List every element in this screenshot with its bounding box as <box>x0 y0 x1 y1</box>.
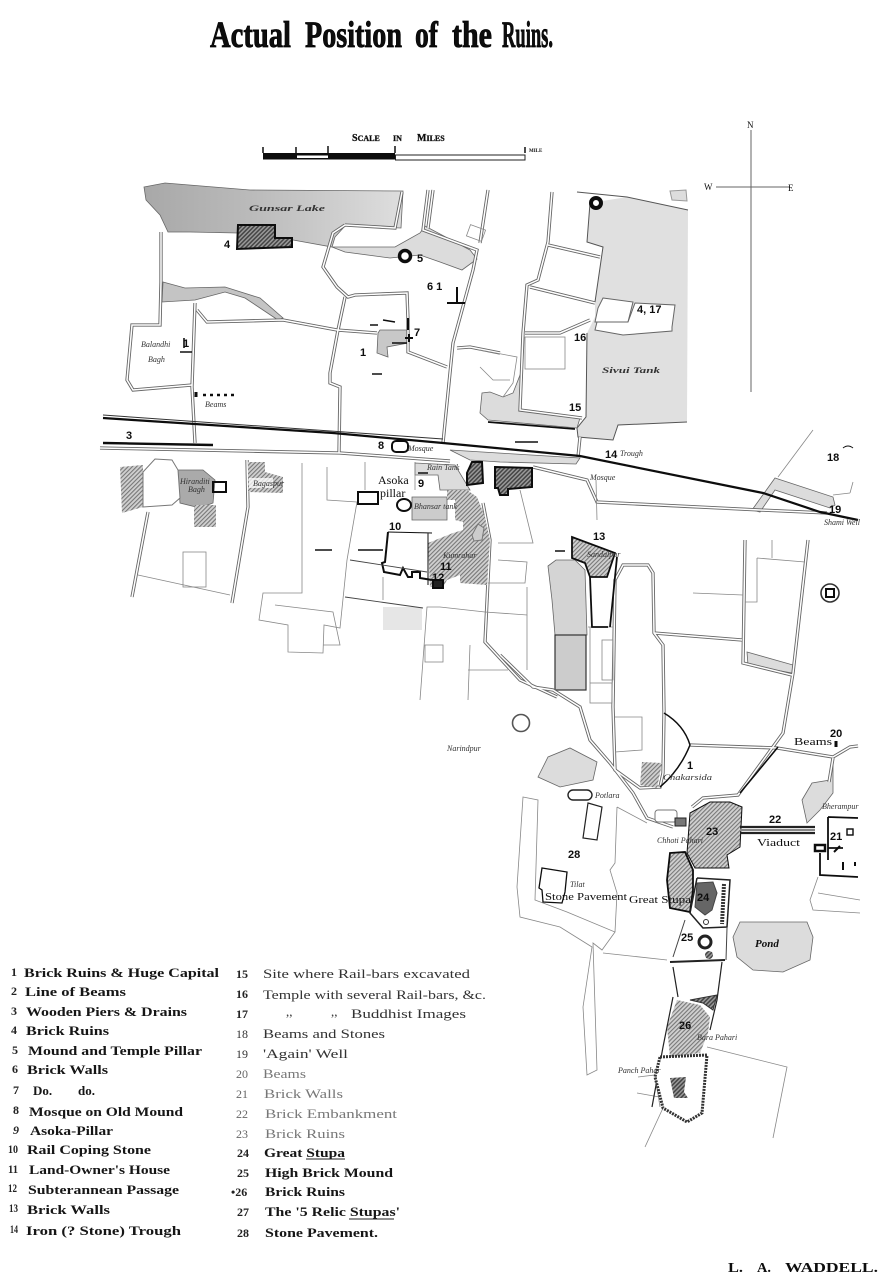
map numbers: 3 <box>126 430 132 442</box>
legend column: items 1 to 14: Brick Walls <box>27 1202 110 1217</box>
legend column: items 1 to 14: Mound and Temple Pillar <box>28 1043 202 1058</box>
scale label: CALE <box>358 134 380 143</box>
legend column: items 1 to 14: 3 <box>11 1004 17 1018</box>
legend column: items 1 to 14: Rail Coping Stone <box>27 1142 151 1157</box>
map numbers: 8 <box>378 440 384 452</box>
compass: E <box>788 183 794 193</box>
legend column: items 1 to 14: do. <box>78 1083 95 1098</box>
map place names: Narindpur <box>446 744 482 753</box>
legend column: items 1 to 14: 12 <box>8 1181 17 1195</box>
map numbers <box>126 239 842 1032</box>
legend column: items 15 to 28: 23 <box>236 1127 248 1141</box>
map numbers: 9 <box>418 478 424 490</box>
map numbers: 15 <box>569 402 581 414</box>
map numbers: 19 <box>829 504 841 516</box>
title: the <box>452 15 492 56</box>
legend column: items 15 to 28: 27 <box>237 1205 249 1219</box>
author credit <box>728 1261 878 1276</box>
legend column: items 1 to 14: Wooden Piers & Drains <box>26 1004 187 1019</box>
map numbers: 1 <box>183 338 189 350</box>
map place names: Great Stupa <box>629 895 691 906</box>
legend <box>8 965 486 1240</box>
map numbers: 6 1 <box>427 281 442 293</box>
map numbers: 21 <box>830 831 842 843</box>
legend column: items 1 to 14: 2 <box>11 984 17 998</box>
map numbers: 28 <box>568 849 580 861</box>
legend column: items 15 to 28: Site where Rail-bars excavated <box>263 966 471 981</box>
legend column: items 15 to 28: 15 <box>236 967 248 981</box>
legend column: items 15 to 28: The '5 Relic Stupas' <box>265 1204 400 1219</box>
map place names: Bagaspur <box>253 479 285 488</box>
other water <box>178 330 835 972</box>
railway line <box>103 418 858 520</box>
wooden piers line <box>103 443 213 445</box>
legend column: items 1 to 14: 11 <box>8 1162 18 1176</box>
map numbers: 1 <box>360 347 366 359</box>
legend column: items 15 to 28: High Brick Mound <box>265 1165 394 1180</box>
legend column: items 1 to 14: Do. <box>33 1083 52 1098</box>
legend column: items 1 to 14 <box>8 965 219 1238</box>
brick walls and enclosure 10 <box>180 225 858 877</box>
map place names: Bagh <box>148 355 165 364</box>
legend column: items 1 to 14: 1 <box>11 965 17 979</box>
legend column: items 15 to 28 <box>231 966 486 1240</box>
legend column: items 15 to 28: 19 <box>236 1047 248 1061</box>
map numbers: 18 <box>827 452 839 464</box>
map numbers: 10 <box>389 521 401 533</box>
map place names: Bhansar tank <box>414 502 457 511</box>
map numbers: 20 <box>830 728 842 740</box>
map numbers: 4 <box>224 239 231 251</box>
author credit: L. <box>728 1261 743 1276</box>
title: Ruins. <box>502 15 553 56</box>
legend column: items 15 to 28: 18 <box>236 1027 248 1041</box>
map numbers: 1 <box>687 760 693 772</box>
author credit: A. <box>757 1261 771 1276</box>
map numbers: 22 <box>769 814 781 826</box>
legend column: items 15 to 28: Stone Pavement. <box>265 1225 378 1240</box>
map place names: Viaduct <box>757 837 800 849</box>
high brick mound ring <box>673 920 727 960</box>
map place names: Kumrahar <box>442 551 477 560</box>
legend column: items 1 to 14: Asoka-Pillar <box>30 1123 113 1138</box>
map numbers: 26 <box>679 1020 691 1032</box>
map numbers: 25 <box>681 932 693 944</box>
scale label: M <box>417 133 427 144</box>
map numbers: 13 <box>593 531 605 543</box>
water: Gunsar Lake: Gunsar Lake <box>249 204 326 213</box>
legend column: items 15 to 28: 24 <box>237 1146 249 1160</box>
stupa walls <box>652 960 725 1107</box>
legend column: items 1 to 14: Mosque on Old Mound <box>29 1104 184 1119</box>
legend column: items 1 to 14: Land-Owner's House <box>29 1162 170 1177</box>
map <box>100 183 861 1147</box>
legend column: items 15 to 28: 17 <box>236 1007 248 1021</box>
other water: Pond <box>755 938 779 950</box>
map place names: Beams <box>794 737 832 748</box>
legend column: items 15 to 28: 16 <box>236 987 248 1001</box>
marker rings <box>392 198 839 903</box>
field boundaries <box>138 225 860 1147</box>
legend column: items 1 to 14: 14 <box>10 1222 18 1236</box>
water: Gunsar Lake <box>144 183 477 320</box>
legend column: items 15 to 28: Great Stupa <box>264 1145 346 1160</box>
water: Sivui tank <box>577 190 688 440</box>
legend column: items 1 to 14: Brick Ruins & Huge Capital <box>24 965 219 980</box>
legend column: items 1 to 14: 13 <box>9 1201 18 1215</box>
legend column: items 15 to 28: Beams and Stones <box>263 1026 385 1041</box>
scale label: S <box>352 133 358 144</box>
great stupa <box>690 878 730 928</box>
map place names: Rain Tank <box>426 463 460 472</box>
legend column: items 15 to 28: Temple with several Rail-bars, &c. <box>263 987 486 1002</box>
author credit: WADDELL. <box>785 1261 878 1276</box>
legend column: items 15 to 28: Brick Embankment <box>265 1106 397 1121</box>
legend column: items 1 to 14: 7 <box>13 1083 19 1097</box>
scale graduated bar: MILE <box>529 149 543 154</box>
map numbers: 5 <box>417 253 423 265</box>
legend column: items 15 to 28: •26 <box>231 1185 247 1199</box>
legend column: items 1 to 14: 5 <box>12 1043 18 1057</box>
map place names <box>141 340 861 1075</box>
water: Sivui tank: Sivui Tank <box>602 366 660 375</box>
map place names: Panch Pahar <box>617 1066 661 1075</box>
compass <box>704 120 794 392</box>
map place names: Hiranditi <box>179 477 210 486</box>
map numbers: 12 <box>432 572 444 584</box>
legend column: items 15 to 28: Brick Walls <box>264 1086 343 1101</box>
embankment line <box>103 415 443 439</box>
map place names: Trough <box>620 449 643 458</box>
water: Sivui tank: 4, 17 <box>637 304 661 316</box>
map place names: Bherampur <box>822 802 859 811</box>
panch pahar enclosure <box>655 1055 707 1122</box>
map numbers: 11 <box>440 561 452 573</box>
legend column: items 1 to 14: Subterannean Passage <box>28 1182 179 1197</box>
map place names: Tilat <box>570 880 585 889</box>
roads <box>100 190 858 827</box>
legend column: items 15 to 28: 20 <box>236 1067 248 1081</box>
map numbers: 7 <box>414 327 420 339</box>
scale bar <box>263 133 543 160</box>
legend column: items 15 to 28: 'Again' Well <box>263 1046 349 1061</box>
map numbers: 24 <box>697 892 710 904</box>
legend column: items 1 to 14: 6 <box>12 1062 18 1076</box>
map place names: Balandhi <box>141 340 170 349</box>
title: of <box>415 15 439 56</box>
title: Actual <box>210 15 291 56</box>
map place names: Chhoti Pahari <box>657 836 703 845</box>
legend column: items 15 to 28: 21 <box>236 1087 248 1101</box>
map place names: Stone Pavement <box>545 892 627 903</box>
map place names: Mosque <box>589 473 616 482</box>
scale label: ILES <box>426 134 445 143</box>
compass: N <box>747 120 754 130</box>
map place names: Potlara <box>594 791 619 800</box>
legend column: items 15 to 28: ,, <box>286 1004 292 1019</box>
legend column: items 15 to 28: ,, <box>331 1004 338 1019</box>
legend column: items 1 to 14: Brick Ruins <box>26 1023 109 1038</box>
viaduct <box>740 827 815 833</box>
legend column: items 1 to 14: 10 <box>8 1142 18 1156</box>
scale label: IN <box>393 134 402 143</box>
title <box>210 15 553 56</box>
scale graduated bar <box>263 146 543 160</box>
map place names: Chakarsida <box>663 773 712 782</box>
legend column: items 15 to 28: Beams <box>263 1066 306 1081</box>
legend column: items 15 to 28: Buddhist Images <box>351 1006 466 1021</box>
hatched ruins <box>120 459 742 1057</box>
map numbers: 16 <box>574 332 586 344</box>
legend column: items 15 to 28: 25 <box>237 1166 249 1180</box>
map place names: Sandalpur <box>587 550 621 559</box>
map numbers: 14 <box>605 449 618 461</box>
map place names: Bara Pahari <box>697 1033 737 1042</box>
title: Position <box>305 15 402 56</box>
legend column: items 15 to 28: Brick Ruins <box>265 1184 345 1199</box>
map place names: Shami Well <box>824 518 861 527</box>
map numbers: 23 <box>706 826 718 838</box>
legend column: items 1 to 14: Brick Walls <box>27 1062 108 1077</box>
map place names: Asoka <box>378 473 409 487</box>
legend column: items 15 to 28: 22 <box>236 1107 248 1121</box>
compass: W <box>704 182 713 192</box>
legend column: items 15 to 28: Brick Ruins <box>265 1126 345 1141</box>
map place names: Mosque <box>407 444 434 453</box>
map place names: pillar <box>380 486 405 500</box>
map place names: Bagh <box>188 485 205 494</box>
map place names: Beams <box>205 400 226 409</box>
legend column: items 1 to 14: 4 <box>11 1023 17 1037</box>
legend column: items 1 to 14: 9 <box>13 1123 19 1137</box>
legend column: items 1 to 14: Iron (? Stone) Trough <box>26 1223 182 1238</box>
legend column: items 1 to 14: Line of Beams <box>25 984 126 999</box>
legend column: items 15 to 28: 28 <box>237 1226 249 1240</box>
legend column: items 1 to 14: 8 <box>13 1103 19 1117</box>
